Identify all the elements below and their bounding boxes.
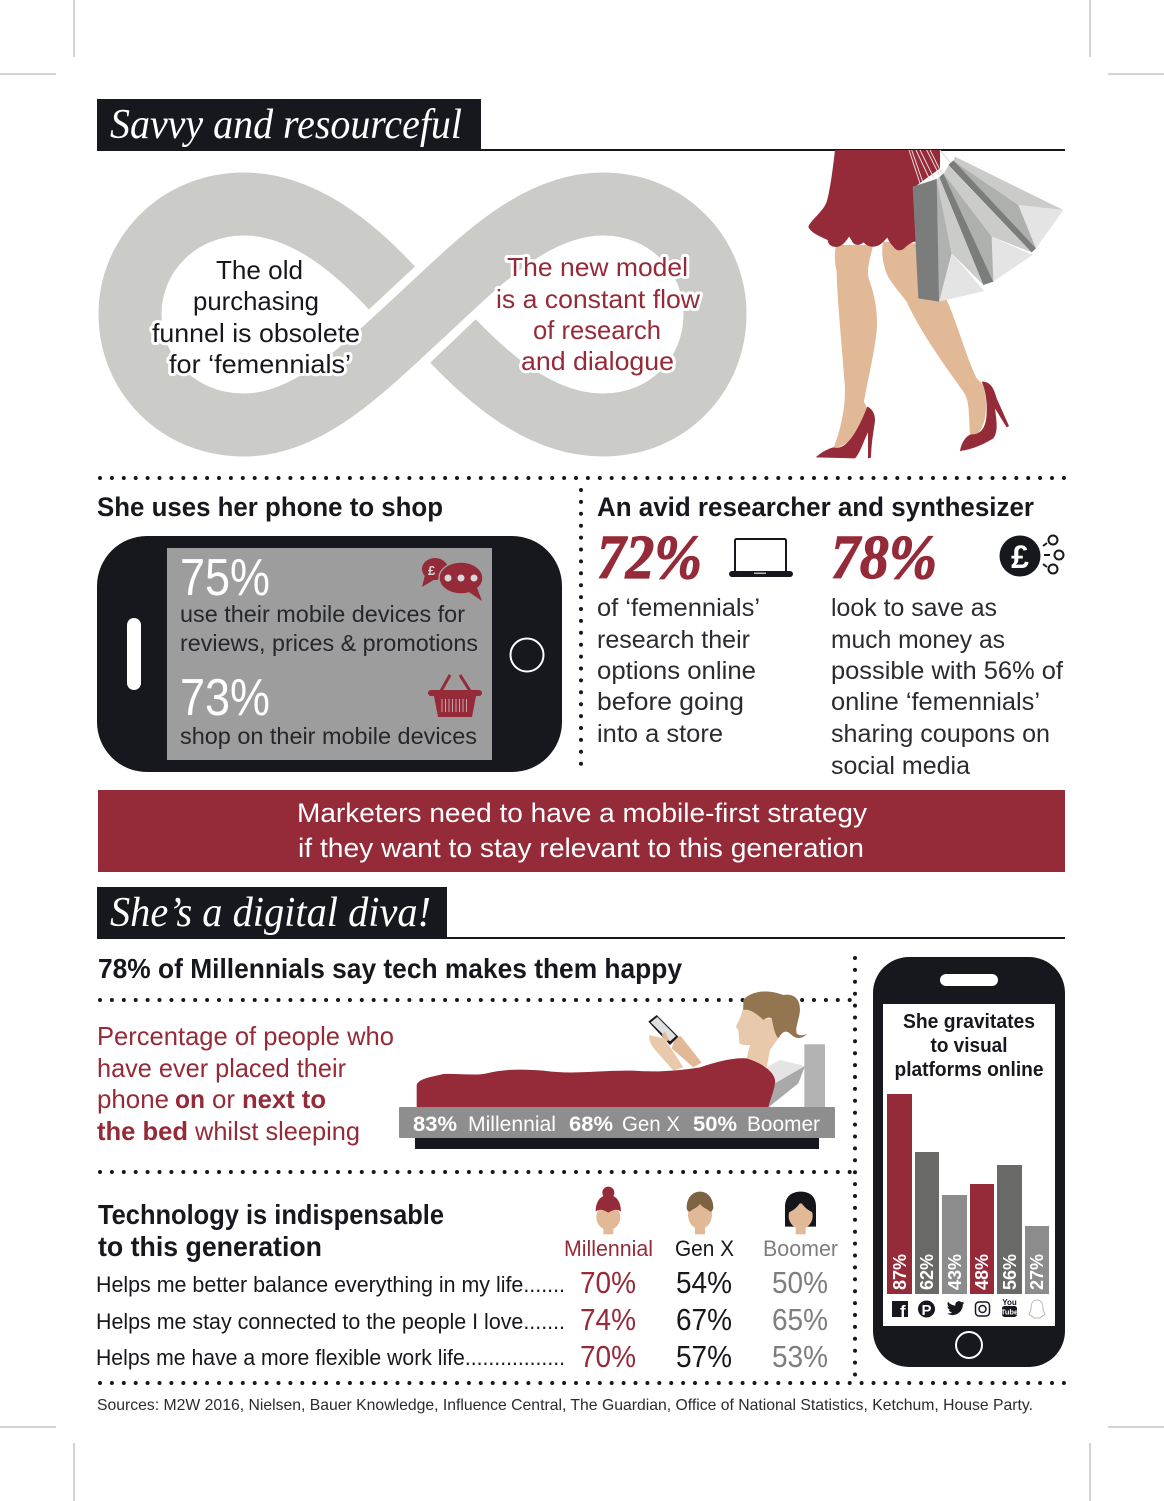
text: research their options: before going bbox=[597, 688, 744, 716]
table row: flexible: Helps me have a more flexible work life................. bbox=[96, 1345, 565, 1370]
table: generation icons and headers: Millennial bbox=[564, 1236, 653, 1261]
text: new model: and dialogue bbox=[521, 346, 674, 376]
stat: 75%: use their mobile devices for bbox=[180, 601, 465, 627]
table row: balance bbox=[96, 1265, 828, 1300]
section heading: Savvy and resourceful bbox=[97, 99, 1065, 151]
text: percentage of people: have ever placed their bbox=[97, 1053, 346, 1083]
icon: facebook: f bbox=[900, 1302, 906, 1321]
table: generation icons and headers: Gen X bbox=[675, 1236, 734, 1261]
text: research their options bbox=[597, 594, 760, 748]
text: save money: social media bbox=[831, 752, 970, 780]
table row: balance: 50% bbox=[772, 1265, 828, 1300]
stat: 75%: 75% bbox=[180, 549, 270, 607]
phone heading: She gravitates bbox=[903, 1011, 1035, 1033]
phone heading: to visual bbox=[930, 1035, 1008, 1057]
heading: Technology is indispensable bbox=[98, 1199, 444, 1262]
text: save money: much money as bbox=[831, 626, 1005, 654]
bar chart: platform usage: 56% bbox=[1000, 1254, 1020, 1290]
icon: twitter bbox=[947, 1301, 964, 1315]
table row: connected bbox=[96, 1302, 828, 1337]
text: percentage of people: on bbox=[175, 1084, 205, 1114]
text: old funnel: purchasing bbox=[193, 286, 319, 316]
stat: 78% save money: 78% bbox=[831, 524, 937, 592]
infinity loop bbox=[130, 204, 715, 425]
bar: percentages by generation: 50% bbox=[693, 1113, 737, 1136]
table: generation icons and headers bbox=[564, 1187, 838, 1261]
banner: mobile-first strategy: Marketers need to have a mobile-first strategy bbox=[297, 798, 868, 828]
icon: pound coin sharing bbox=[1000, 536, 1064, 576]
bar chart: platform usage: 62% bbox=[917, 1254, 937, 1290]
bar: percentages by generation: 83% bbox=[413, 1113, 457, 1136]
icon: pound coin sharing: £ bbox=[1011, 539, 1029, 575]
text: research their options: of ‘femennials’ bbox=[597, 594, 760, 622]
section heading: She's a digital diva! bbox=[97, 887, 1065, 939]
stat: 72% research online bbox=[597, 524, 793, 748]
icon: instagram bbox=[976, 1302, 990, 1316]
text: save money: possible with 56% of bbox=[831, 657, 1063, 685]
text: percentage of people: or bbox=[212, 1084, 235, 1114]
woman, pillow, blanket bbox=[417, 991, 825, 1108]
heading: 78% of Millennials: 78% of Millennials say tech makes them happy bbox=[98, 953, 682, 984]
icon: speech bubbles: £ bbox=[428, 563, 436, 578]
text: old funnel bbox=[152, 255, 360, 379]
stat: 73%: shop on their mobile devices bbox=[180, 723, 477, 749]
stat: 72% research online: 72% bbox=[597, 524, 702, 592]
stat: 75% bbox=[180, 549, 478, 656]
table row: flexible: 57% bbox=[676, 1339, 732, 1374]
table row: flexible: 70% bbox=[580, 1339, 636, 1374]
icon: youtube: Tube bbox=[1001, 1308, 1018, 1316]
banner: mobile-first strategy: if they want to stay relevant to this generation bbox=[298, 833, 864, 863]
text: percentage of people: phone bbox=[97, 1084, 169, 1114]
bar: percentages by generation: Boomer bbox=[747, 1113, 820, 1136]
icon: gen x head bbox=[687, 1192, 713, 1234]
icon: boomer head bbox=[785, 1192, 816, 1234]
text: save money: online ‘femennials’ bbox=[831, 688, 1040, 716]
stat: 73% bbox=[180, 669, 477, 749]
text: new model: The new model bbox=[507, 252, 688, 282]
table row: connected: 65% bbox=[772, 1302, 828, 1337]
icons: social platforms bbox=[892, 1298, 1045, 1321]
table row: flexible bbox=[96, 1339, 828, 1374]
text: percentage of people: Percentage of people who bbox=[97, 1021, 394, 1051]
icon: pinterest bbox=[918, 1300, 935, 1319]
icon: snapchat bbox=[1029, 1300, 1045, 1318]
stat: 75%: reviews, prices & promotions bbox=[180, 630, 478, 656]
bar: percentages by generation bbox=[399, 1107, 835, 1138]
table row: connected: Helps me stay connected to the people I love....... bbox=[96, 1309, 565, 1334]
icon: facebook bbox=[892, 1301, 908, 1321]
portrait phone panel: visual platforms bbox=[873, 957, 1065, 1367]
icon: laptop bbox=[729, 539, 793, 577]
stat: 73%: 73% bbox=[180, 669, 270, 727]
heading: An avid researcher and synthesizer: An avid researcher and synthesizer bbox=[597, 492, 1034, 522]
table row: balance: Helps me better balance everything in my life....... bbox=[96, 1272, 565, 1297]
text: save money bbox=[831, 594, 1063, 780]
text: old funnel: for ‘femennials’ bbox=[169, 349, 351, 379]
infinity diagram: old funnel vs new model bbox=[130, 204, 715, 425]
text: research their options: into a store bbox=[597, 720, 723, 748]
text: old funnel: funnel is obsolete bbox=[152, 318, 360, 348]
text: research their options: research their bbox=[597, 626, 750, 654]
table: generation icons and headers: Boomer bbox=[763, 1236, 838, 1261]
icon: youtube bbox=[1001, 1298, 1018, 1317]
sources footnote: Sources: M2W 2016, Nielsen, Bauer Knowledge, Influence Central, The Guardian, Office of National Statistics, Ketchum, House Party. bbox=[97, 1397, 1033, 1414]
text: percentage of people: next to bbox=[242, 1084, 326, 1114]
table row: balance: 54% bbox=[676, 1265, 732, 1300]
text: save money: sharing coupons on bbox=[831, 720, 1050, 748]
icon: speech bubbles bbox=[422, 558, 483, 601]
text: new model: is a constant flow bbox=[496, 284, 700, 314]
bar: percentages by generation: Millennial bbox=[468, 1113, 556, 1136]
heading: She uses her phone to shop: She uses her phone to shop bbox=[97, 492, 443, 522]
text: research their options: options online bbox=[597, 657, 756, 685]
bar chart: platform usage bbox=[887, 1094, 1049, 1294]
text: new model: of research bbox=[533, 315, 661, 345]
icon: youtube: You bbox=[1002, 1298, 1017, 1307]
heading: Technology is indispensable: Technology is indispensable bbox=[98, 1199, 444, 1230]
text: percentage of people: the bed bbox=[97, 1116, 188, 1146]
landscape phone panel bbox=[97, 536, 562, 772]
phone heading: platforms online bbox=[894, 1059, 1044, 1081]
icon: shopping basket bbox=[428, 675, 482, 717]
illustration: legs in red dress with shopping bags bbox=[808, 150, 1063, 458]
section heading: Savvy and resourceful: Savvy and resourceful bbox=[110, 102, 462, 148]
bar: percentages by generation: Gen X bbox=[622, 1113, 680, 1136]
bar chart: platform usage: 43% bbox=[945, 1254, 965, 1290]
bar: percentages by generation: 68% bbox=[569, 1113, 613, 1136]
icon: pinterest: P bbox=[921, 1302, 932, 1319]
table row: connected: 67% bbox=[676, 1302, 732, 1337]
bar chart: platform usage: 87% bbox=[890, 1254, 910, 1290]
text: old funnel: The old bbox=[216, 255, 303, 285]
text: save money: look to save as bbox=[831, 594, 997, 622]
section heading: She's a digital diva!: She’s a digital diva! bbox=[110, 890, 431, 936]
text: percentage of people bbox=[97, 1021, 394, 1146]
illustration: woman in bed with phone bbox=[399, 991, 835, 1149]
stat: 78% save money bbox=[831, 524, 1064, 780]
table row: flexible: 53% bbox=[772, 1339, 828, 1374]
text: new model bbox=[496, 252, 700, 376]
heading: Technology is indispensable: to this generation bbox=[98, 1231, 322, 1262]
icon: millennial head bbox=[596, 1187, 621, 1234]
text: percentage of people: whilst sleeping bbox=[194, 1116, 360, 1146]
table row: balance: 70% bbox=[580, 1265, 636, 1300]
bar chart: platform usage: 27% bbox=[1027, 1254, 1047, 1290]
banner: mobile-first strategy bbox=[98, 790, 1065, 872]
table row: connected: 74% bbox=[580, 1302, 636, 1337]
bar chart: platform usage: 48% bbox=[972, 1254, 992, 1290]
phone heading bbox=[894, 1011, 1044, 1081]
